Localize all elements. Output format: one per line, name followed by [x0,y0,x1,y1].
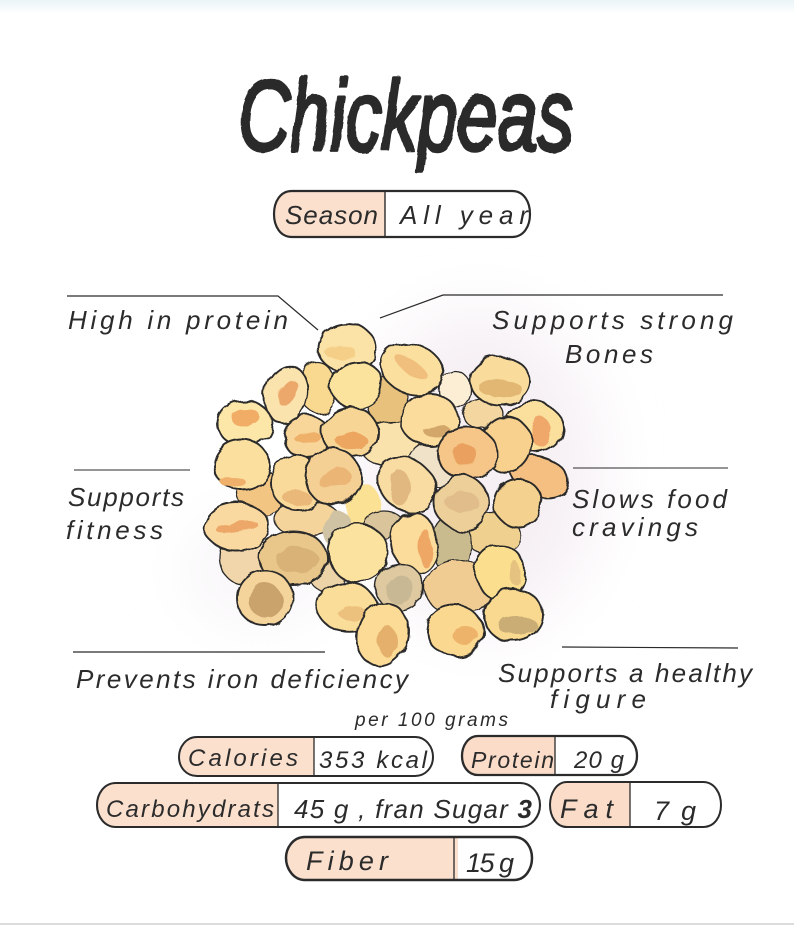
back layer of peas [219,363,520,616]
nutrition pill: fiber: 15 g [466,848,514,878]
chickpea illustration [205,324,575,671]
callout: prevents iron deficiency: Prevents iron deficiency [76,664,410,694]
title: Chickpeas [238,60,573,172]
callout: supports strong bones: Supports strong [492,305,734,335]
callout: supports a healthy figure: figure [550,684,646,714]
callout: high in protein: High in protein [68,305,288,335]
nutrition pill: calories [179,737,433,776]
nutrition pill: carbohydrates: 45 g , fran Sugar 3 [294,794,533,824]
nutrition pill: protein: Protein [471,747,554,773]
front layer of peas [205,324,575,671]
nutrition pill: fat [550,782,721,827]
background watercolour wash [190,310,600,630]
per 100 grams label: per 100 grams [354,710,508,731]
callout: supports a healthy figure [498,647,754,714]
callout: supports fitness [66,470,190,545]
nutrition pill: carbohydrates [97,783,540,827]
callout: high in protein [67,296,318,335]
callout: slows food cravings: Slows food [572,484,729,514]
nutrition pill: calories: 353 kcal [319,747,428,774]
nutrition pill: fat: Fat [560,794,614,824]
callout: supports fitness: fitness [66,515,163,545]
callout: supports a healthy figure: Supports a healthy [498,658,754,688]
callout: supports strong bones [380,295,734,369]
nutrition pill: protein: 20 g [573,747,625,774]
nutrition pill: fat: 7 g [654,796,696,826]
nutrition pill: fiber [286,837,532,880]
callout: supports strong bones: Bones [565,339,653,369]
callout: slows food cravings: cravings [572,512,698,542]
callout: supports fitness: Supports [68,482,184,512]
season pill [274,191,530,237]
season pill: All year [398,200,529,230]
nutrition pill: fiber: Fiber [306,846,389,876]
nutrition pill: calories: Calories [188,745,298,772]
nutrition pill: carbohydrates: Carbohydrats [106,796,274,823]
callout: slows food cravings [572,468,729,542]
season pill: Season [285,200,378,230]
nutrition pill: protein [462,736,637,775]
